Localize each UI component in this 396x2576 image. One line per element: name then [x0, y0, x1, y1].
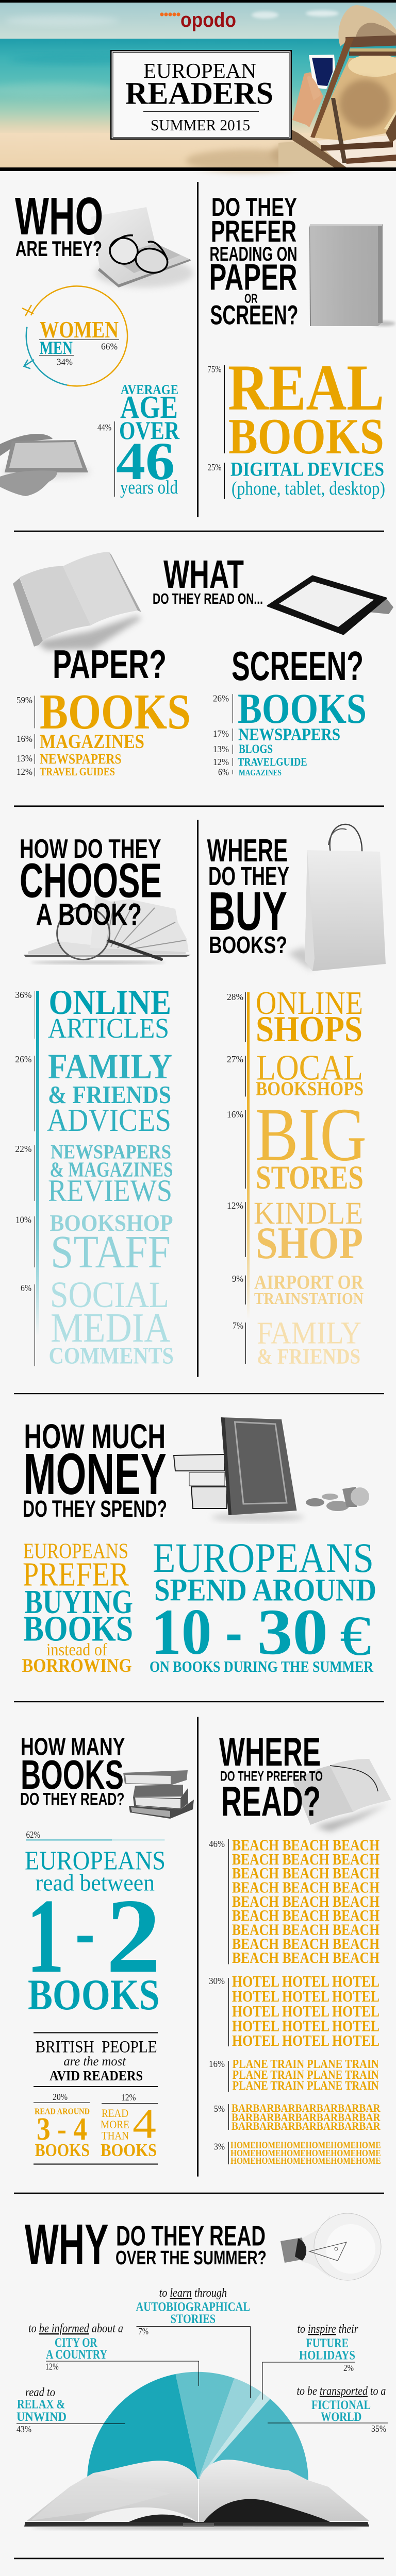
- chart: gender circle: MEN: [40, 337, 73, 358]
- heading: how much money do they spend: MONEY: [24, 1442, 167, 1506]
- icon: hands holding tablet: [0, 434, 90, 496]
- title box: [110, 50, 292, 140]
- stat: 20 percent read 3-4 books: READ AROUND: [35, 2106, 90, 2116]
- stat: 12 percent read more than 4 books: 12%: [121, 2092, 136, 2103]
- callout: city or country 12 percent: A COUNTRY: [46, 2348, 107, 2362]
- callout: autobiographical stories 7 percent: 7%: [138, 2326, 148, 2336]
- stat: read between 1-2 books: 2: [106, 1877, 161, 1995]
- chart: gender circle: 66%: [101, 342, 118, 352]
- callout: fictional world 35 percent: FICTIONAL: [311, 2398, 371, 2412]
- stat: prefer buying books: [22, 1539, 133, 1676]
- icon: open book with ribbon: [293, 1759, 391, 1832]
- panel: paper or screen: [207, 193, 395, 499]
- stat: spend around 10-30 euros: 10: [151, 1596, 211, 1668]
- list: purchase places: 9%: [232, 1274, 243, 1284]
- callout: relax and unwind 43 percent: read to: [25, 2386, 55, 2399]
- list: home 3 percent: 3%: [214, 2142, 225, 2152]
- heading: prefer paper or screen: PAPER: [209, 258, 297, 298]
- heading: why do they read over the summer: [25, 2213, 267, 2276]
- column: paper list: BOOKS: [40, 684, 191, 739]
- icon: grey hardback book: [309, 224, 395, 326]
- stat: 62 percent bar: 62%: [26, 1829, 40, 1840]
- heading: why do they read over the summer: DO THEY READ: [116, 2219, 266, 2251]
- icon: book with glasses: [91, 207, 193, 287]
- callout: autobiographical stories 7 percent: STORIES: [171, 2312, 216, 2326]
- stat: prefer buying books: BOOKS: [23, 1609, 133, 1649]
- deck chair: [291, 36, 396, 167]
- heading: who are they: [15, 187, 103, 261]
- list: choice sources: STAFF: [51, 1227, 171, 1278]
- column: paper list: 59%: [16, 695, 32, 705]
- heading: where do they buy books: [207, 833, 289, 958]
- icon: light bulb: [280, 2213, 381, 2280]
- column: screen list: NEWSPAPERS: [238, 725, 340, 744]
- stat: digital devices: [207, 459, 385, 499]
- column: screen list: 17%: [213, 728, 229, 739]
- column: screen list: 13%: [213, 744, 229, 754]
- list: choice sources: [15, 982, 174, 1368]
- stat: prefer buying books: BORROWING: [22, 1655, 132, 1676]
- stat: 20 percent read 3-4 books: 20%: [53, 2092, 68, 2102]
- heading: where do they prefer to read: DO THEY PREFER TO: [220, 1769, 323, 1784]
- icon: books and coins: [174, 1417, 369, 1521]
- stat: 12 percent read more than 4 books: BOOKS: [101, 2140, 157, 2160]
- stat: average age: 44%: [97, 422, 111, 433]
- column: screen list: 6%: [218, 767, 229, 777]
- heading: how do they choose a book: [20, 834, 162, 932]
- chart: semicircle of reasons: [87, 2372, 308, 2481]
- heading: who are they: ARE THEY?: [15, 236, 102, 261]
- stat: prefer buying books: EUROPEANS: [23, 1539, 128, 1563]
- title box: READERS: [125, 76, 273, 111]
- list: purchase places: SHOPS: [256, 1009, 362, 1049]
- list: choice sources: MEDIA: [51, 1306, 171, 1351]
- stat: digital devices: 25%: [207, 462, 222, 472]
- icon: paper shopping bag: [288, 824, 386, 971]
- list: choice sources: 10%: [15, 1215, 31, 1225]
- list: purchase places: & FRIENDS: [257, 1345, 360, 1369]
- heading: how many books: HOW MANY: [21, 1734, 125, 1761]
- stat: spend around 10-30 euros: EUROPEANS: [153, 1534, 374, 1581]
- column: paper list: 12%: [16, 767, 32, 777]
- stat: read between 1-2 books: [25, 1846, 166, 2019]
- stat: read between 1-2 books: read between: [36, 1870, 155, 1896]
- stat: read between 1-2 books: -: [75, 1889, 95, 1974]
- heading: prefer paper or screen: OR: [244, 292, 258, 306]
- list: choice sources: 36%: [15, 990, 31, 1000]
- heading: how many books: [20, 1734, 125, 1809]
- callout: british avid readers: AVID READERS: [50, 2068, 143, 2083]
- panel: what do they read on: [13, 552, 393, 778]
- stat: 12 percent read more than 4 books: READ: [102, 2107, 128, 2120]
- stat: 12 percent read more than 4 books: THAN: [102, 2129, 129, 2142]
- stat: 20 percent read 3-4 books: 3 - 4: [37, 2112, 87, 2147]
- column: paper list: NEWSPAPERS: [40, 751, 122, 767]
- list: purchase places: 12%: [227, 1200, 243, 1211]
- callout: british avid readers: are the most: [63, 2055, 126, 2069]
- callout: autobiographical stories 7 percent: to learn through: [159, 2286, 227, 2300]
- stat: read between 1-2 books: BOOKS: [28, 1971, 160, 2019]
- list: choice sources: ADVICES: [47, 1103, 171, 1138]
- column: screen list: TRAVELGUIDE: [238, 755, 307, 768]
- heading: where do they buy books: WHERE: [207, 833, 288, 869]
- list: choice sources: 6%: [21, 1283, 31, 1293]
- heading: where do they buy books: BOOKS?: [209, 931, 287, 958]
- column: paper list: TRAVEL GUIDES: [40, 765, 115, 778]
- heading: why do they read over the summer: OVER THE SUMMER?: [116, 2247, 267, 2269]
- list: purchase places: 7%: [233, 1320, 243, 1331]
- icon: hat: [338, 5, 396, 46]
- heading: how do they choose a book: A BOOK?: [36, 897, 142, 932]
- list: bar 5 percent: [214, 2102, 381, 2132]
- stat: average age: OVER: [119, 416, 180, 445]
- list: purchase places: AIRPORT OR: [254, 1272, 364, 1294]
- stat: 12 percent read more than 4 books: [101, 2092, 158, 2160]
- stat: average age: 46: [116, 432, 175, 491]
- list: bar 5 percent: BARBARBARBARBARBARBAR: [232, 2120, 381, 2132]
- heading: prefer paper or screen: READING ON: [209, 243, 297, 265]
- stat: real books: [207, 352, 384, 465]
- stat: read between 1-2 books: EUROPEANS: [25, 1846, 166, 1876]
- list: beach 46 percent: [209, 1836, 380, 1967]
- stat: prefer buying books: instead of: [46, 1640, 108, 1659]
- column: screen list: 12%: [213, 757, 229, 767]
- panel: where do they buy books: [207, 824, 386, 1369]
- list: purchase places: 28%: [227, 992, 243, 1002]
- icon: large open book: [24, 2460, 369, 2530]
- stat: 12 percent read more than 4 books: 4: [133, 2100, 156, 2147]
- column: screen list: MAGAZINES: [239, 768, 282, 777]
- heading: how do they choose a book: CHOOSE: [20, 853, 162, 908]
- list: purchase places: 27%: [227, 1054, 243, 1064]
- callout: future holidays 2 percent: FUTURE: [306, 2336, 349, 2350]
- heading: prefer paper or screen: PREFER: [211, 215, 296, 248]
- list: choice sources: 22%: [15, 1144, 31, 1154]
- column: screen list: 26%: [213, 693, 229, 704]
- stat: average age: AVERAGE: [121, 382, 178, 397]
- panel: who are they: [0, 187, 193, 498]
- list: purchase places: ONLINE: [256, 985, 363, 1021]
- title box: EUROPEAN: [143, 59, 256, 82]
- divider: [197, 182, 199, 517]
- stat: average age: [97, 382, 180, 498]
- stat: average age: years old: [120, 477, 178, 498]
- stat: spend around 10-30 euros: SPEND AROUND: [154, 1573, 376, 1608]
- heading: where do they prefer to read: [219, 1729, 323, 1825]
- column: screen list: BOOKS: [238, 685, 367, 732]
- heading: how much money do they spend: HOW MUCH: [24, 1417, 166, 1456]
- callout: future holidays 2 percent: [262, 2323, 358, 2400]
- list: purchase places: BIG: [255, 1093, 367, 1177]
- list: choice sources: NEWSPAPERS: [51, 1141, 171, 1163]
- list: choice sources: REVIEWS: [48, 1174, 172, 1208]
- column: screen list: BLOGS: [239, 743, 273, 756]
- list: choice sources: 26%: [15, 1054, 31, 1064]
- heading: how many books: DO THEY READ?: [20, 1790, 125, 1809]
- list: choice sources: SOCIAL: [50, 1274, 169, 1315]
- bar: gradient scale: [36, 991, 39, 1336]
- list: choice sources: & FRIENDS: [48, 1080, 171, 1109]
- list: purchase places: TRAINSTATION: [254, 1289, 364, 1308]
- list: bar 5 percent: BARBARBARBARBARBARBAR: [232, 2111, 381, 2124]
- callout: british avid readers: BRITISH PEOPLE: [36, 2038, 157, 2057]
- chart: gender circle: [22, 286, 127, 386]
- heading: what do they read on: [153, 552, 263, 607]
- icon: legs of reader: [292, 72, 323, 127]
- list: purchase places: FAMILY: [257, 1316, 361, 1351]
- heading: what do they read on: WHAT: [163, 552, 244, 597]
- logo: opodo: [160, 9, 236, 31]
- list: purchase places: [227, 985, 367, 1369]
- callout: fictional world 35 percent: 35%: [371, 2424, 386, 2434]
- column: paper list: 16%: [16, 734, 32, 744]
- stat: spend around 10-30 euros: 30: [257, 1596, 328, 1668]
- stat: 12 percent read more than 4 books: MORE: [101, 2118, 129, 2131]
- stat: prefer buying books: BUYING: [25, 1583, 133, 1621]
- heading: where do they prefer to read: READ?: [221, 1778, 321, 1825]
- heading: prefer paper or screen: DO THEY: [211, 193, 297, 222]
- heading: what do they read on: DO THEY READ ON...: [153, 591, 263, 607]
- chart: gender circle: 34%: [57, 357, 73, 367]
- stat: real books: 75%: [207, 364, 222, 375]
- list: purchase places: 16%: [227, 1109, 243, 1120]
- callout: autobiographical stories 7 percent: AUTOBIOGRAPHICAL: [136, 2300, 250, 2314]
- callout: autobiographical stories 7 percent: [136, 2286, 250, 2398]
- callout: future holidays 2 percent: 2%: [343, 2363, 354, 2373]
- column: screen list: [213, 643, 367, 777]
- heading: who are they: WHO: [15, 187, 103, 246]
- icon: tablet in hands: [309, 55, 335, 89]
- list: choice sources: COMMENTS: [48, 1343, 174, 1368]
- heading: where do they prefer to read: WHERE: [219, 1729, 321, 1774]
- list: purchase places: KINDLE: [254, 1196, 363, 1231]
- heading: how much money do they spend: DO THEY SPEND?: [23, 1496, 167, 1522]
- stat: spend around 10-30 euros: €: [340, 1604, 371, 1667]
- column: paper list: [16, 641, 191, 778]
- panel: why do they read: [16, 2213, 388, 2530]
- list: choice sources: FAMILY: [48, 1047, 172, 1086]
- bar: gradient scale: [247, 992, 250, 1319]
- list: choice sources: ONLINE: [48, 982, 171, 1022]
- heading: where do they buy books: DO THEY: [208, 861, 289, 891]
- list: bar 5 percent: BARBARBARBARBARBARBAR: [232, 2102, 381, 2114]
- icon: stack of books: [123, 1770, 194, 1819]
- list: choice sources: BOOKSHOP: [50, 1210, 173, 1236]
- column: paper list: 13%: [16, 753, 32, 764]
- list: home 3 percent: [214, 2140, 381, 2166]
- callout: city or country 12 percent: [28, 2322, 199, 2386]
- panel: where do they prefer to read: [209, 1729, 391, 2166]
- callout: relax and unwind 43 percent: UNWIND: [16, 2410, 67, 2424]
- callout: city or country 12 percent: to be informed about a: [28, 2322, 123, 2335]
- heading: prefer paper or screen: SCREEN?: [210, 300, 298, 331]
- list: choice sources: ARTICLES: [48, 1012, 169, 1044]
- callout: fictional world 35 percent: [268, 2385, 388, 2434]
- list: bar 5 percent: 5%: [214, 2104, 225, 2114]
- panel: how many books: [20, 1734, 194, 2165]
- heading: how do they choose a book: HOW DO THEY: [20, 834, 161, 864]
- stat: spend around 10-30 euros: -: [225, 1595, 242, 1667]
- list: purchase places: SHOP: [256, 1218, 363, 1268]
- callout: british avid readers: [34, 2032, 158, 2087]
- list: purchase places: STORES: [256, 1159, 364, 1196]
- stat: 20 percent read 3-4 books: BOOKS: [35, 2140, 90, 2160]
- heading: where do they buy books: BUY: [208, 881, 287, 942]
- callout: city or country 12 percent: 12%: [45, 2362, 59, 2372]
- logo: opodo: opodo: [180, 9, 236, 31]
- hero banner: beach photo with reader: [0, 0, 396, 172]
- callout: relax and unwind 43 percent: RELAX &: [17, 2398, 65, 2411]
- heading: prefer paper or screen: [209, 193, 298, 331]
- callout: relax and unwind 43 percent: [16, 2386, 125, 2434]
- stat: spend around 10-30 euros: [150, 1534, 376, 1675]
- column: paper list: MAGAZINES: [40, 731, 144, 753]
- list: plane train 16 percent: 16%: [209, 2059, 225, 2069]
- icon: tablet: [268, 576, 393, 634]
- heading: how much money do they spend: [23, 1417, 167, 1522]
- callout: city or country 12 percent: CITY OR: [55, 2336, 97, 2350]
- list: purchase places: LOCAL: [256, 1048, 363, 1088]
- heading: why do they read over the summer: WHY: [25, 2213, 109, 2276]
- stat: 20 percent read 3-4 books: [34, 2092, 90, 2160]
- list: beach 46 percent: 46%: [209, 1839, 225, 1849]
- list: plane train 16 percent: [209, 2058, 379, 2093]
- list: hotel 30 percent: 30%: [209, 1976, 225, 1986]
- stat: prefer buying books: PREFER: [23, 1556, 129, 1593]
- callout: fictional world 35 percent: WORLD: [321, 2410, 361, 2424]
- callout: relax and unwind 43 percent: 43%: [16, 2424, 31, 2434]
- panel: how much money: [22, 1417, 376, 1676]
- list: hotel 30 percent: [209, 1973, 380, 2049]
- title box: SUMMER 2015: [151, 116, 250, 134]
- callout: future holidays 2 percent: HOLIDAYS: [299, 2348, 355, 2363]
- heading: how many books: BOOKS: [21, 1752, 124, 1798]
- panel: how do they choose a book: [15, 834, 191, 1368]
- list: choice sources: & MAGAZINES: [50, 1158, 173, 1181]
- stat: average age: AGE: [120, 390, 178, 425]
- list: purchase places: BOOKSHOPS: [256, 1078, 364, 1100]
- icon: open blank book: [13, 552, 142, 650]
- column: paper list: PAPER?: [53, 641, 167, 687]
- stat: read between 1-2 books: 1: [26, 1877, 64, 1995]
- callout: fictional world 35 percent: to be transported to a: [297, 2385, 386, 2398]
- chart: gender circle: WOMEN: [40, 316, 119, 343]
- icon: open book and magnifier: [24, 895, 191, 964]
- callout: future holidays 2 percent: to inspire their: [297, 2323, 358, 2336]
